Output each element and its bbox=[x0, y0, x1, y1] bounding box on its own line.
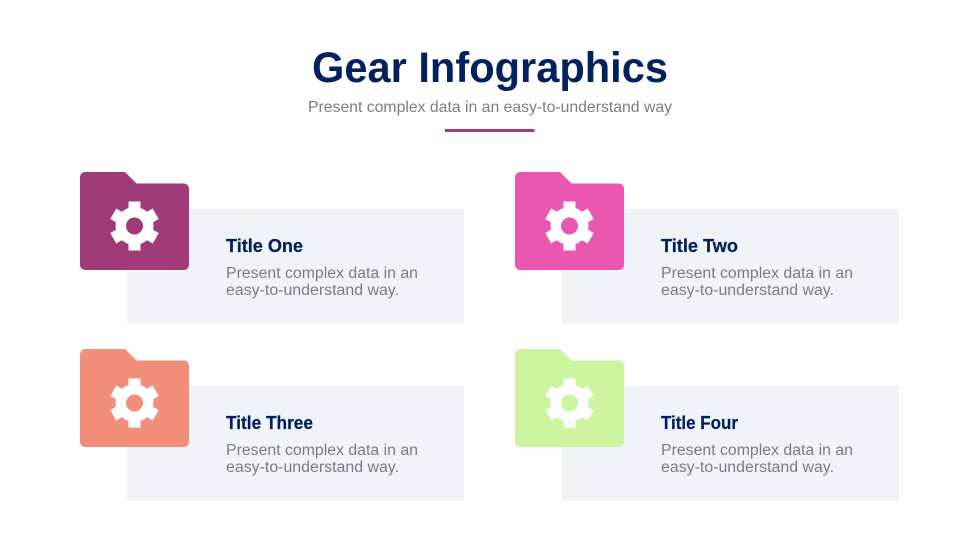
card background bbox=[562, 209, 899, 324]
text block: Present complex data in an bbox=[226, 442, 418, 459]
text block line two: easy-to-understand way. bbox=[226, 459, 399, 476]
subtitle: Present complex data in an easy-to-understand way bbox=[308, 99, 672, 116]
icon: purple folder with gear bbox=[80, 172, 189, 270]
text block: Present complex data in an bbox=[226, 265, 418, 282]
icon: pink folder with gear bbox=[515, 172, 624, 270]
heading: title four: Title Four bbox=[661, 412, 738, 433]
text block line two: easy-to-understand way. bbox=[226, 282, 399, 299]
icon: lime folder with gear bbox=[515, 349, 624, 447]
panel: card one bbox=[80, 172, 464, 324]
panel: card four bbox=[515, 349, 899, 501]
text block line two: easy-to-understand way. bbox=[661, 282, 834, 299]
card background bbox=[127, 386, 464, 501]
card background bbox=[562, 386, 899, 501]
text block: Present complex data in an bbox=[661, 265, 853, 282]
panel: card three bbox=[80, 349, 464, 501]
heading: title two: Title Two bbox=[661, 235, 738, 256]
icon: coral folder with gear bbox=[80, 349, 189, 447]
title underline bbox=[445, 129, 534, 132]
heading: title one: Title One bbox=[226, 235, 303, 256]
card background bbox=[127, 209, 464, 324]
text block line two: easy-to-understand way. bbox=[661, 459, 834, 476]
title: Gear Infographics bbox=[312, 44, 668, 92]
heading: title three: Title Three bbox=[226, 412, 313, 433]
panel: card two bbox=[515, 172, 899, 324]
text block: Present complex data in an bbox=[661, 442, 853, 459]
